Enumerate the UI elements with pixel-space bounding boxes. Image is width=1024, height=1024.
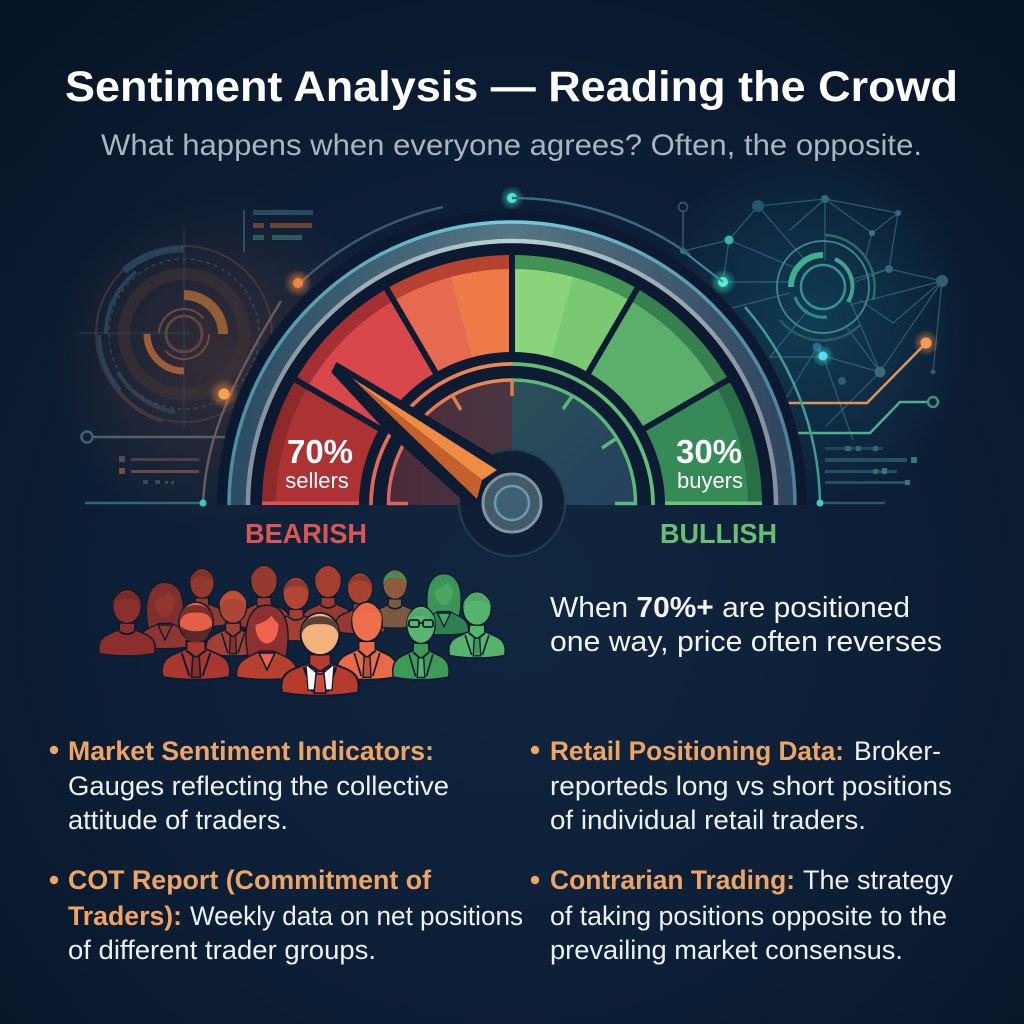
back row: [100, 566, 504, 657]
title: Sentiment Analysis — Reading the Crowd: [65, 63, 958, 111]
glowing node: right blue: [812, 345, 834, 367]
left tech decoration: lines and data bars: [82, 207, 443, 503]
segment 3: orange: [387, 255, 512, 375]
node: top centre teal: [500, 186, 524, 210]
bullet: Contrarian Trading: Contrarian Trading:: [550, 865, 795, 895]
needle: [333, 364, 505, 505]
right trend lines: [512, 198, 938, 503]
bullet: Retail Positioning Data: reporteds long vs short positions: [550, 771, 952, 801]
inner scale arc: [371, 364, 653, 505]
segment 1: deep red: [262, 380, 382, 505]
bullet: COT Report: of different trader groups.: [68, 935, 376, 965]
bullet: Retail Positioning Data: Retail Positioning Data:: [550, 736, 844, 766]
bullet: Retail Positioning Data: [531, 736, 952, 835]
bullet: Contrarian Trading: [531, 865, 954, 965]
subtitle: What happens when everyone agrees? Often, the opposite.: [101, 129, 922, 162]
left glow: [45, 190, 385, 530]
glowing node: upper left orange: [284, 269, 312, 297]
label: BEARISH: BEARISH: [245, 518, 367, 549]
gauge dark backing: [217, 210, 807, 505]
segment 6: deep green: [642, 380, 762, 505]
segment 4: light green: [512, 255, 637, 375]
orange node: trend end: [913, 330, 939, 356]
gauge outer ring: [229, 222, 795, 505]
node: lower right teal: [816, 500, 824, 506]
bullet: Contrarian Trading: prevailing market consensus.: [550, 935, 903, 965]
node: lower left teal: [200, 500, 206, 506]
bullet: Market Sentiment Indicators: attitude of traders.: [68, 805, 288, 835]
segment 5: green: [587, 288, 728, 430]
glowing node: right teal: [710, 269, 736, 295]
bullet: Market Sentiment Indicators: Market Sentiment Indicators:: [68, 736, 434, 766]
callout: 70% reversal note: When 70%+ are positioned: [550, 592, 910, 624]
inner dark band: [359, 352, 665, 505]
callout: 70% reversal note: one way, price often reverses: [550, 626, 942, 658]
bullet: Market Sentiment Indicators: Gauges reflecting the collective: [68, 771, 449, 801]
segment dividers: [291, 250, 733, 430]
bullet: Market Sentiment Indicators: [50, 736, 449, 835]
hub backing: [459, 450, 565, 556]
value: 30% buyers: [676, 433, 743, 493]
right glow: [650, 140, 980, 500]
value: 70% sellers: 70%: [287, 433, 353, 470]
front row: [163, 603, 448, 695]
bullet: Contrarian Trading: The strategy: [803, 865, 954, 895]
left tech decoration: concentric radar: [79, 228, 272, 428]
bullet: Retail Positioning Data: Broker-: [854, 736, 941, 766]
inner dial: [387, 380, 637, 505]
crowd of traders: [100, 566, 504, 695]
segment base strips: [262, 502, 360, 505]
segment 2: red: [296, 288, 437, 430]
needle hub: [483, 474, 541, 532]
bullet: COT Report: COT Report (Commitment of: [68, 865, 431, 895]
value: 70% sellers: sellers: [285, 468, 349, 493]
value: 30% buyers: buyers: [677, 468, 743, 493]
right data bars: [825, 446, 917, 485]
glowing node: lower left orange: [209, 379, 239, 409]
bullet: Contrarian Trading: of taking positions opposite to the: [550, 901, 947, 931]
bullet: Retail Positioning Data: of individual retail traders.: [550, 805, 866, 835]
right tech decoration: network graph: [683, 199, 942, 440]
central trader: [282, 614, 358, 695]
bullet: COT Report: Traders):: [68, 901, 182, 931]
label: BULLISH: BULLISH: [660, 518, 777, 549]
bullet: COT Report: Weekly data on net positions: [190, 901, 523, 931]
bullet: COT Report: [50, 865, 523, 965]
value: 30% buyers: 30%: [676, 433, 742, 470]
right tech decoration: radar rings: [777, 235, 875, 340]
value: 70% sellers: [285, 433, 353, 493]
gauge: [217, 210, 807, 556]
callout: 70% reversal note: [550, 592, 942, 658]
right tech decoration: network nodes: [678, 195, 948, 385]
